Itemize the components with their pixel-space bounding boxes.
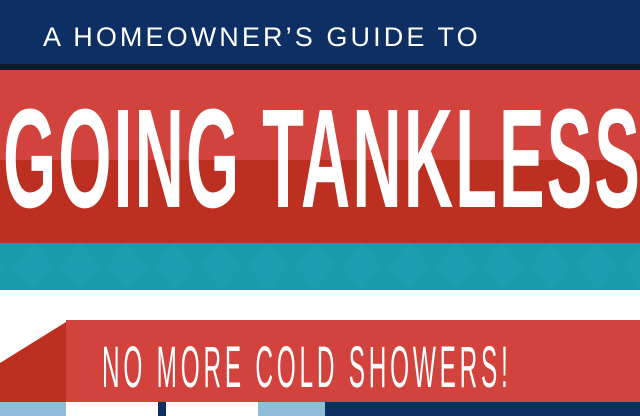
title banner [0, 70, 640, 243]
teal patterned band [0, 243, 640, 290]
ribbon text: NO MORE COLD SHOWERS! [102, 335, 512, 400]
ribbon: no more cold showers [66, 320, 640, 402]
title text: GOING TANKLESS [3, 79, 640, 237]
subtitle text: A HOMEOWNER’S GUIDE TO [43, 22, 481, 52]
header band [0, 0, 640, 64]
ribbon fold [0, 322, 66, 402]
bottom strip [0, 402, 640, 416]
